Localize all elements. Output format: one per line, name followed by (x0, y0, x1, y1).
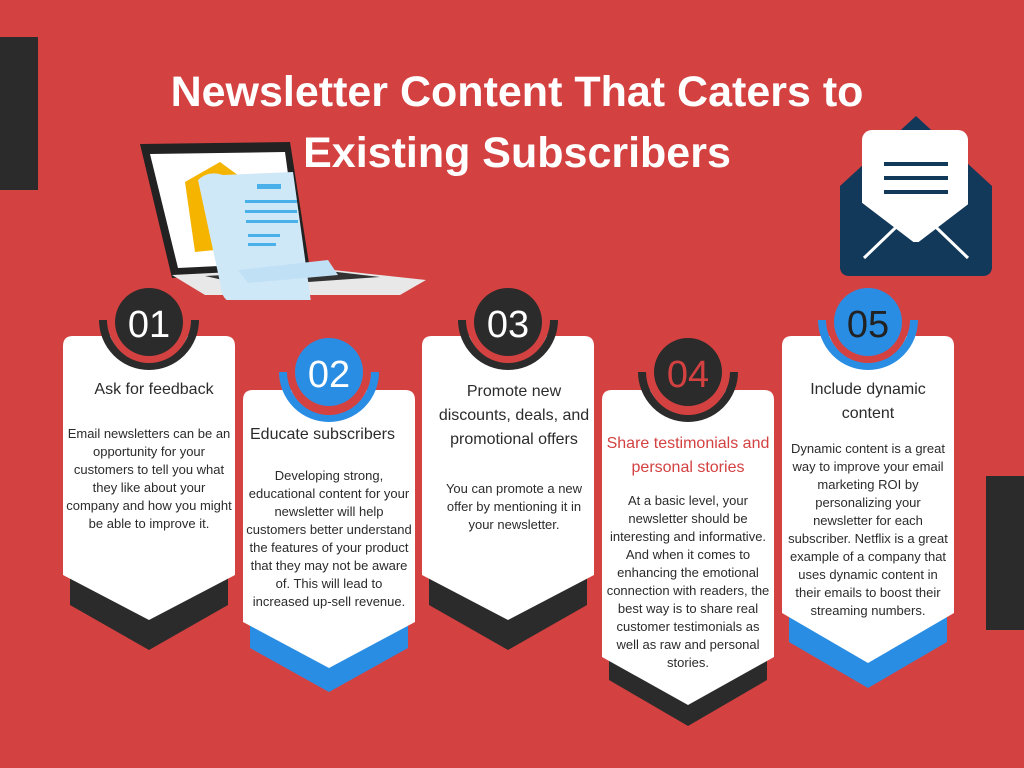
icon: envelope (840, 116, 992, 276)
card 2 heading: Educate subscribers (250, 426, 395, 443)
card 1 text (66, 381, 232, 531)
decorative bar left (0, 37, 38, 190)
card 1 shape: 01 (128, 304, 170, 346)
card 4 shape (602, 333, 774, 726)
card 5 heading (810, 381, 926, 422)
card 5 text (788, 381, 948, 618)
card 1 body: Email newsletters can be an opportunity for your customers to tell you what they like about your company and how you might be able to improve it. (66, 426, 232, 531)
card 3 text (439, 383, 589, 532)
card 2 text (246, 426, 412, 609)
card 3 shape: 03 (487, 304, 529, 346)
card 4 body: At a basic level, your newsletter should be interesting and informative. And when it comes to enhancing the emotional connection with readers, the best way is to share real customer testimonials as well as raw and personal stories. (607, 493, 769, 670)
card 4 text (607, 435, 769, 670)
card 4 heading: personal stories (632, 459, 744, 476)
card 4 heading: Share testimonials and (607, 435, 769, 452)
card 2 shape: 02 (308, 354, 350, 396)
card 5 heading: content (842, 405, 894, 422)
card 2 shape (243, 333, 415, 692)
card 4 heading (607, 435, 769, 476)
decorative bar right (986, 476, 1024, 630)
card 2 body: Developing strong, educational content for your newsletter will help customers better understand the features of your product that they may not be aware of. This will lead to increased up-sell revenue. (246, 468, 412, 609)
card 5 shape: 05 (847, 304, 889, 346)
card 5 body: Dynamic content is a great way to improve your email marketing ROI by personalizing your newsletter for each subscriber. Netflix is a great example of a company that uses dynamic content in their emails to boost their streaming numbers. (788, 441, 948, 618)
card 3 heading: Promote new discounts, deals, and promotional offers (439, 383, 589, 448)
card 3 shape (422, 281, 594, 650)
card 5 heading: Include dynamic (810, 381, 926, 398)
card 1 heading: Ask for feedback (94, 381, 214, 398)
title: Newsletter Content That Caters to (171, 68, 863, 116)
title (171, 68, 863, 177)
card 3 body: You can promote a new offer by mentioning it in your newsletter. (446, 481, 582, 532)
title: Existing Subscribers (303, 129, 731, 177)
card 4 shape: 04 (667, 354, 709, 396)
card 5 shape (782, 281, 954, 688)
illustration: laptop with email (140, 142, 426, 300)
card 1 shape (63, 281, 235, 650)
